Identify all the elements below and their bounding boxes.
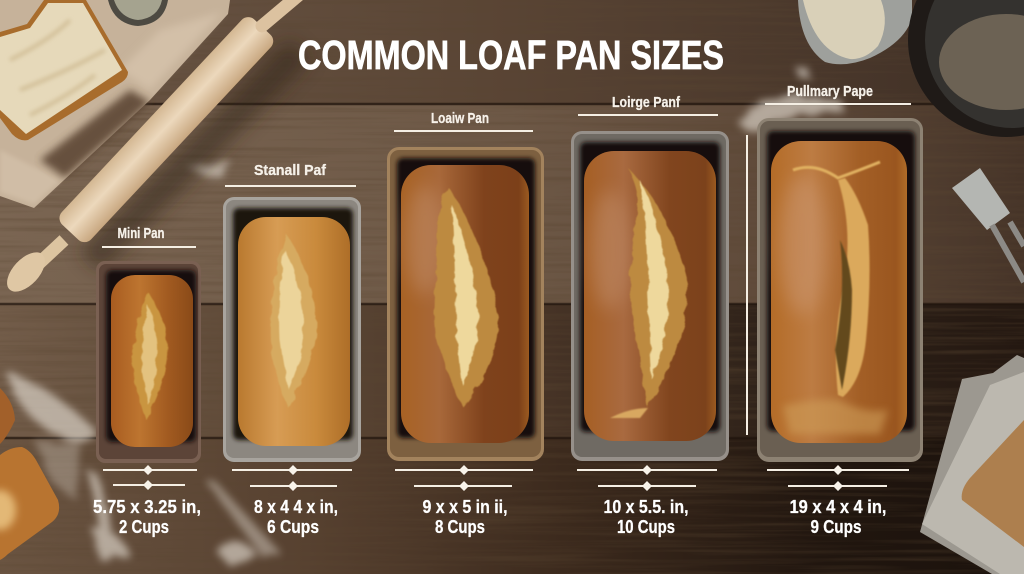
- mini pan label: Mini Pan: [118, 225, 164, 242]
- pullman pan dimensions: 19 x 4 x 4 in,: [790, 497, 886, 517]
- stacked metal pans top-right: [908, 0, 1024, 137]
- pullman pan label: Pullmary Pape: [787, 83, 873, 100]
- loaf pan label: [394, 110, 533, 131]
- mini pan with loaf: [96, 261, 201, 463]
- cloth and wooden board bottom-right: [920, 355, 1024, 574]
- large pan with loaf: [571, 131, 729, 461]
- panel: large pan: [571, 94, 729, 537]
- panel: mini pan: [93, 225, 201, 537]
- flour dusting: [5, 66, 842, 568]
- pullman pan dimensions: [767, 465, 909, 537]
- panel: loaf pan: [387, 110, 544, 537]
- small pan dimensions: [232, 465, 352, 537]
- rolling pin: [0, 0, 300, 298]
- title: COMMON LOAF PAN SIZES: [298, 32, 724, 78]
- vertical height guide: [746, 135, 748, 435]
- loaf pan dimensions: 9 x x 5 in ii,: [422, 497, 508, 517]
- mini pan dimensions: 5.75 x 3.25 in,: [93, 497, 201, 517]
- small dish top-left: [108, 0, 168, 26]
- panel: pullman pan: [757, 83, 923, 537]
- mini pan dimensions: [93, 465, 201, 537]
- flour bowl top-right: [798, 0, 912, 64]
- spatula: [952, 168, 1024, 282]
- bread slice: [0, 0, 128, 140]
- mini pan dimensions: 2 Cups: [119, 517, 169, 537]
- small pan dimensions: 6 Cups: [267, 517, 319, 537]
- pullman pan with loaf: [757, 118, 923, 462]
- small pan label: [225, 162, 356, 186]
- loaf pan with loaf: [387, 147, 544, 461]
- loaf pan dimensions: 8 Cups: [435, 517, 485, 537]
- small pan label: Stanall Paf: [254, 162, 327, 179]
- bread rolls bottom-left: [0, 388, 59, 560]
- loaf pan dimensions: [395, 465, 533, 537]
- small pan dimensions: 8 x 4 4 x in,: [254, 497, 338, 517]
- loaf pan label: Loaiw Pan: [431, 110, 489, 127]
- parchment paper: [0, 0, 230, 208]
- large pan dimensions: 10 Cups: [617, 517, 675, 537]
- mini pan label: [102, 225, 196, 247]
- small pan with loaf: [223, 197, 361, 462]
- large pan dimensions: 10 x 5.5. in,: [604, 497, 688, 517]
- panel: small pan: [223, 162, 361, 537]
- large pan label: [578, 94, 718, 115]
- large pan label: Loirge Panf: [612, 94, 681, 111]
- pullman pan dimensions: 9 Cups: [810, 517, 862, 537]
- large pan dimensions: [577, 465, 717, 537]
